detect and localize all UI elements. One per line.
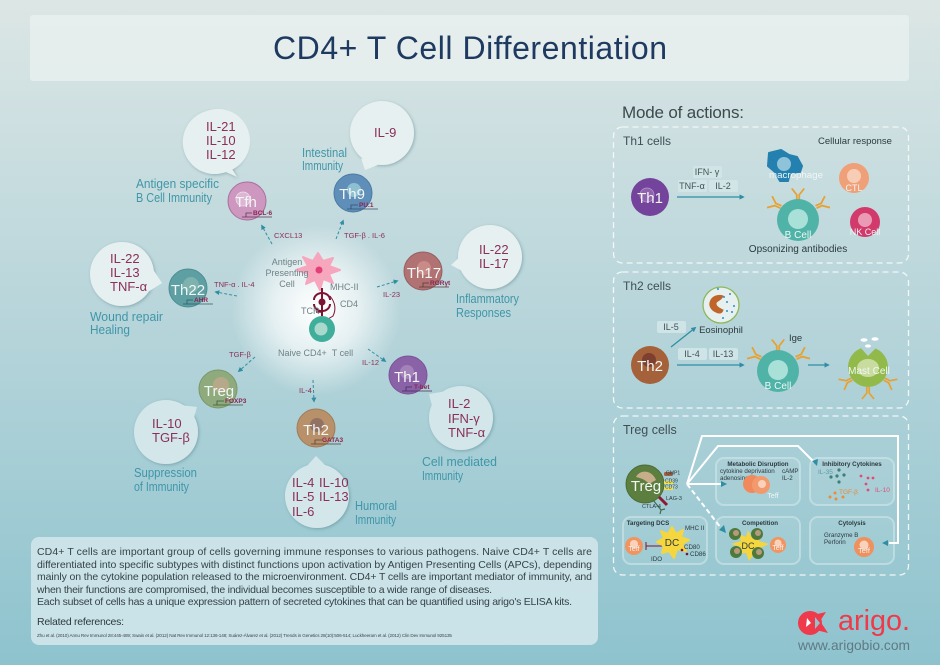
cytokines: IL-22 [110,251,140,266]
naive T cell nucleus [314,322,328,336]
outcome: Intestinal [302,145,347,160]
box: inhibitory cytokines: TGF-β [839,489,858,496]
gene [311,440,341,444]
synapse MHC-II TCR [314,288,335,319]
description text [36,546,592,608]
cytokines: IFN-γ [448,411,480,426]
macrophage [768,150,802,181]
arrow to eosinophil [671,328,695,347]
gene [183,300,213,304]
arrow labels: IL-12 [362,358,379,367]
Treg cell with surface markers: CTLA-4 [642,504,661,510]
gene name: T-bet [414,384,430,391]
cell name: Th9 [339,186,365,203]
tag: IFN-gamma: IFN- γ [695,167,720,177]
macrophage nucleus [777,157,791,171]
panel: Treg cells [614,416,908,575]
gene name: GATA3 [322,437,343,444]
tag: IL-2 [709,180,738,192]
outcome: Immunity [302,158,343,173]
APC label: Antigen [272,257,302,267]
tag: TNF-alpha: TNF-α [679,181,705,191]
subset: Th2 [285,409,397,528]
nucleus [310,418,324,432]
outcome [136,176,219,205]
box: targeting DCs: DC [665,538,679,549]
outcome: Antigen specific [136,176,219,191]
box: metabolic disruption: Teff [767,493,779,500]
cytokines: IL-9 [374,125,396,140]
references heading: Related references: [37,616,124,628]
outcome: Responses [456,305,511,320]
cell name: Th17 [407,265,441,282]
box: targeting DCs: Teff [628,546,640,553]
box: targeting DCs: CD86 [690,551,706,558]
CD4 label: CD4 [340,299,358,309]
NK label: NK Cell [850,227,880,237]
title banner: CD4+ T Cell Differentiation [273,30,667,66]
gene name: FOXP3 [225,398,247,405]
cell [404,252,442,290]
gene [213,401,243,405]
outcome [422,454,497,483]
Th2 cell icon [631,346,669,384]
cell [169,269,207,307]
box: metabolic disruption: Metabolic Disruption [727,461,789,468]
box: metabolic disruption: cAMP [782,468,799,475]
box: metabolic disruption: cytokine deprivation [720,468,775,475]
box: targeting DCs: MHC II [685,525,705,532]
CTL nucleus [847,169,861,183]
box: inhibitory cytokines: IL-10 [875,487,890,494]
subset: Th22 [90,242,213,337]
tag: IL-13 [709,348,738,360]
box: competition [716,517,800,564]
box: competition: DC [742,541,755,551]
cytokines: IL-10 [206,133,236,148]
cellular response label: Cellular response [818,136,892,147]
Th1 name: Th1 [637,190,663,207]
cytokines: TNF-α [110,279,148,294]
box: targeting DCs: IDO [651,556,662,563]
cytokines: IL-2 [448,396,470,411]
outcome: B Cell Immunity [136,190,212,205]
cell name: Th22 [171,282,205,299]
MHC-II label: MHC-II [330,282,358,292]
description text: CD4+ T cells are important group of cells governing immune responses to various pathogens. Naive CD4+ T cells are [37,546,592,558]
B cell label: B Cell [765,381,791,392]
box: cytolysis: Cytolysis [838,520,866,527]
CTL cell [839,163,869,193]
outcome: Immunity [422,468,463,483]
cytokine bubble [429,386,493,450]
subset: Treg [134,370,247,494]
Th1 nucleus [640,188,654,202]
cytokines: IL-4 [292,475,314,490]
gene name: PU.1 [359,202,374,209]
box: inhibitory cytokines [810,458,894,505]
cell name: Th2 [303,422,329,439]
logo mark [798,611,828,635]
arrow to mast cell [808,364,828,366]
TCR label: TCR [301,306,320,316]
box: cytolysis [810,517,894,564]
CTL label: CTL [845,183,863,193]
arrow labels: IL-23 [383,290,400,299]
subset: Th17 [404,225,522,320]
cytokines: TNF-α [448,425,486,440]
box: cytolysis: Granzyme B [824,532,858,539]
nucleus [236,192,250,206]
tag: IL-5 [657,321,686,333]
arigo logo [797,605,910,653]
outcome: of Immunity [134,479,189,494]
tag: IL-2: IL-2 [715,181,731,191]
panel: Th1 cells [614,127,908,263]
outcome [456,291,519,320]
arrow labels: TNF-α . IL-4 [214,280,255,289]
cytokines: IL-22 [479,242,509,257]
arrow labels [214,231,400,395]
outcome: Humoral [355,498,397,513]
cytokines: IL-21 [206,119,236,134]
cell [389,356,427,394]
APC label: Cell [279,279,295,289]
icon: antigen presenting cell [296,253,340,290]
cell [297,409,335,447]
eosinophil label: Eosinophil [699,325,743,336]
tag: IL-13: IL-13 [713,349,733,359]
arrow labels: TGF-β [229,350,251,359]
nucleus [400,365,414,379]
macrophage label: macrophage [769,170,823,180]
outcome [355,498,397,527]
box: inhibitory cytokines: Inhibitory Cytokines [822,461,882,468]
cytokines: IL-6 [292,504,314,519]
mast cell label: Mast Cell [848,366,890,377]
nucleus [347,183,361,197]
Treg cell with surface markers: CD73 [665,484,678,490]
box: targeting DCs: Targeting DCS [627,520,669,527]
box: competition: Competition [742,520,778,527]
nucleus [417,261,431,275]
description text: differentiated into specific subtypes with distinct functions upon activation by Antigen Presenting Cells (APCs), depending [37,559,592,571]
cytokines: IL-5 [292,489,314,504]
Treg cell with surface markers: CD39 [665,478,678,484]
box: targeting DCs: CD80 [684,544,700,551]
central glow [231,225,401,395]
gene [347,205,378,209]
Treg cell with surface markers: LAG-3 [666,496,682,502]
tag: IL-5: IL-5 [663,322,679,332]
references text: Zhu et al. (2010) Annu Rev Immunol 28:445-489; Swain et al. (2012) Nat Rev Immunol 12:136-148; Suárez-Álvarez et al. (2012) Trends in Genetics 28(10):506-514; Luckheeram et al. (2012) Clin Dev Immunol 925135 [37,632,452,638]
gene name: RORγt [430,280,451,287]
arrow [677,196,743,198]
outcome: Healing [90,322,130,337]
heading: Th1 cells [623,134,671,148]
description text: Each subset of cells has a unique expression pattern of secreted cytokines that can be quantified using arigo's ELISA kits. [37,596,572,608]
naive T cell label: Naive CD4+ T cell [278,348,353,358]
logo text: arigo. [838,605,910,637]
cell [199,370,237,408]
Treg cell with surface markers: GMP1 [666,470,680,476]
outcome: Inflammatory [456,291,519,306]
cell [334,174,372,212]
NK cell [850,207,880,237]
differentiation arrows [216,221,397,401]
cytokine bubble [285,464,349,528]
tag: IL-4 [678,348,707,360]
cytokines: IL-17 [479,256,509,271]
Treg cell with surface markers [626,465,682,514]
eosinophil [703,287,739,323]
Th2 nucleus [642,353,656,367]
cell [228,182,266,220]
box: cytolysis: Teff [858,546,871,555]
gene [419,283,449,287]
outcome: Immunity [355,512,396,527]
cytokine bubble [458,225,522,289]
tag: IL-4: IL-4 [684,349,700,359]
arrow to B cell [677,364,743,366]
opsonizing antibodies label: Opsonizing antibodies [749,244,847,255]
nucleus [213,377,229,393]
B cell with antibodies [767,188,830,241]
gene name: AHR [194,297,208,304]
cell name: Tfh [235,194,257,211]
subset: Tfh [136,109,273,220]
title banner [30,15,909,81]
cytokine bubble [183,110,247,177]
cell name: Treg [204,383,234,400]
mode of actions heading: Mode of actions: [622,103,744,122]
cytokines: IL-10 [152,416,182,431]
outcome: Cell mediated [422,454,497,469]
cytokine bubble [350,101,414,165]
outcome: Suppression [134,465,197,480]
B cell label: B Cell [785,230,811,241]
cytokines: IL-12 [206,147,236,162]
Th2 name: Th2 [637,358,663,375]
gene [242,213,272,217]
heading: Th2 cells [623,279,671,293]
outcome [90,309,164,337]
outcome: Wound repair [90,309,164,324]
website: www.arigobio.com [797,637,910,653]
description text: mainly on the cytokine population released to the microenvironment. CD4+ T cells are important mediator of immunity, and [37,571,592,583]
IgE label: Ige [789,333,802,344]
heading: Treg cells [623,423,677,437]
box: cytolysis: Perforin [824,539,846,546]
box: metabolic disruption: adenosine [720,475,749,482]
outcome [134,465,197,494]
central antigen presenting cell and naive T cell [265,253,358,358]
nucleus [183,277,199,293]
box: metabolic disruption: IL-2 [782,475,793,482]
box: inhibitory cytokines: IL-35 [818,469,833,476]
arrow labels: CXCL13 [274,231,302,240]
arrow labels: TGF-β . IL-6 [344,231,385,240]
APC label: Presenting [265,268,309,278]
gene name: BCL-6 [253,210,273,217]
gene [402,387,432,391]
Treg cell with surface markers: Treg [631,478,661,495]
arrow labels: IL-4 [299,386,312,395]
cytokine bubble [90,242,154,306]
subset: Th1 [389,356,497,483]
box: targeting DCs [623,517,707,564]
mast cell [839,337,897,399]
box: metabolic disruption [716,458,800,505]
naive T cell [309,316,335,342]
cytokines: IL-10 [319,475,349,490]
cytokine bubble [134,400,198,464]
NK nucleus [858,213,872,227]
description panel [31,537,598,645]
APC nucleus [316,266,322,274]
outcome [302,145,347,173]
B cell with IgE [747,340,810,392]
cytokines: TGF-β [152,430,190,445]
cytokines: IL-13 [110,265,140,280]
panel: Th2 cells [614,272,908,408]
Th1 cell icon [631,178,669,216]
cell name: Th1 [394,369,420,386]
cytokines: IL-13 [319,489,349,504]
box: competition: Teff [772,545,784,552]
subset: Th9 [302,101,414,212]
description text: when their functions are compromised, the individual becomes susceptible to a wide range of diseases. [36,584,492,596]
white pathway arrows [687,436,898,546]
